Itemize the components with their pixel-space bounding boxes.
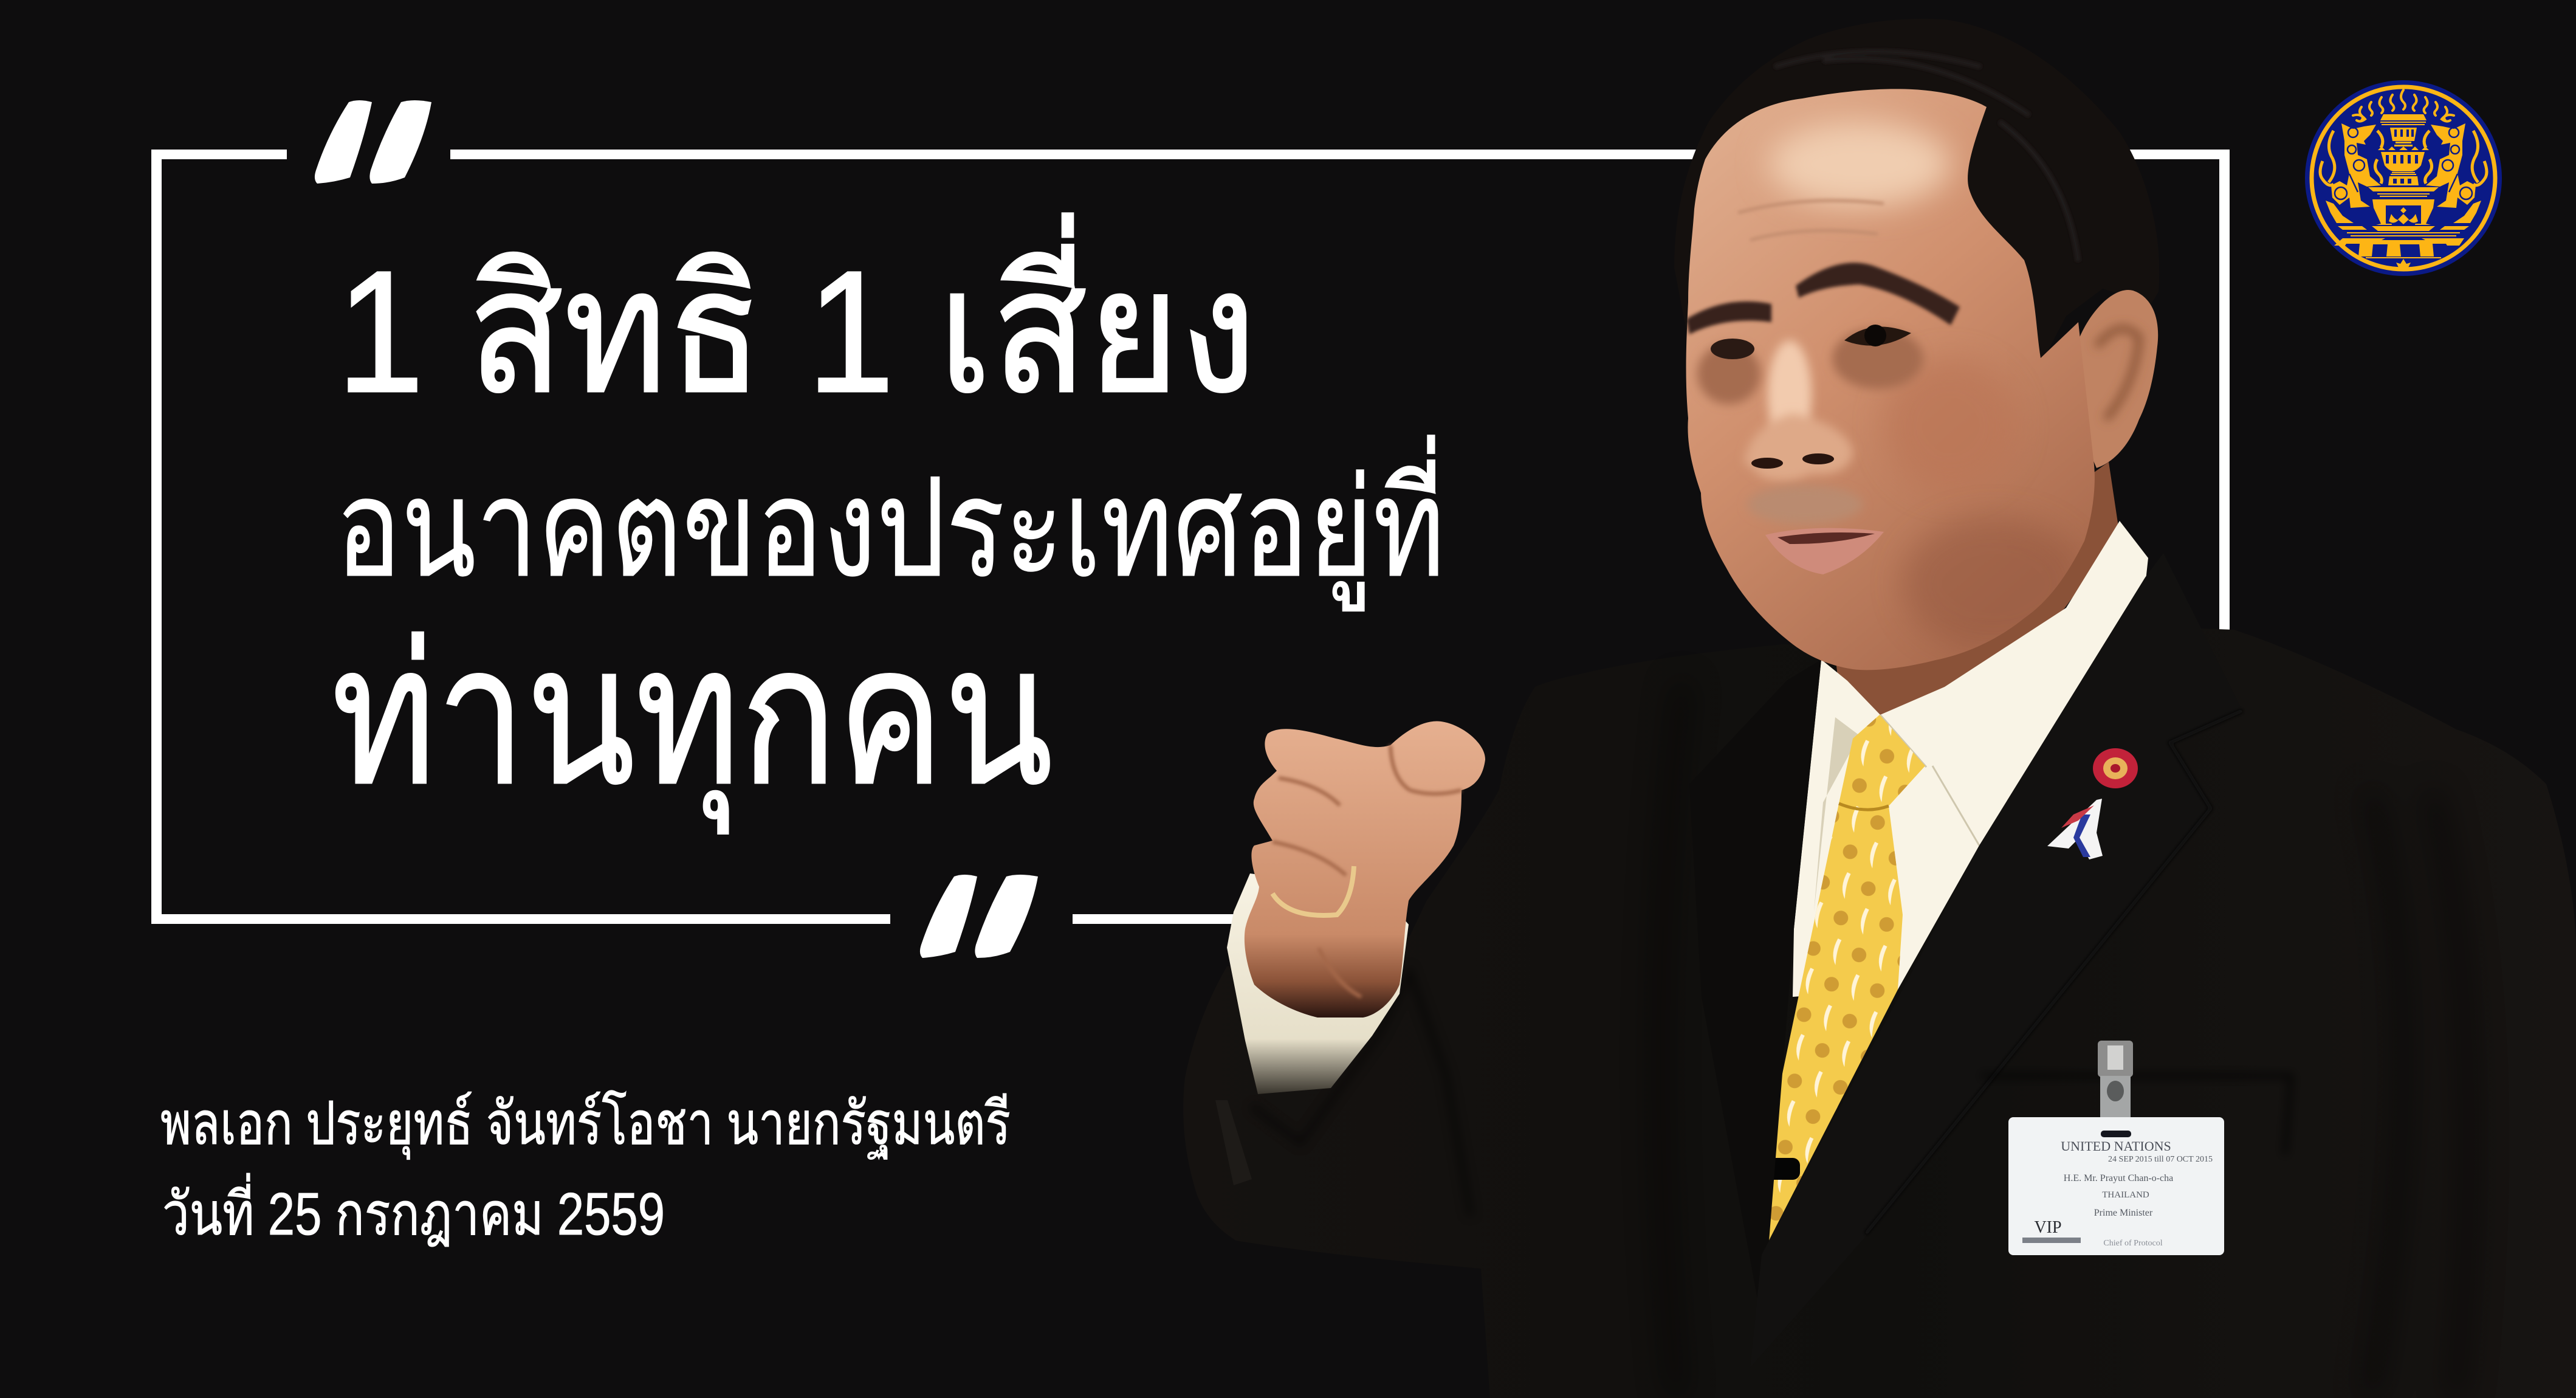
shirt cuff xyxy=(1227,873,1409,1094)
collar edge xyxy=(1880,715,1979,845)
left eye xyxy=(1711,339,1754,359)
seal flames xyxy=(2353,90,2454,122)
quote frame xyxy=(151,150,2230,924)
upper lip shade xyxy=(1747,485,1863,524)
ID badge: THAILAND xyxy=(2102,1190,2149,1200)
right eyebrow xyxy=(1796,263,1960,325)
wedding ring xyxy=(1273,866,1354,915)
hair highlights xyxy=(1774,52,2078,261)
ID badge: 24 SEP 2015 till 07 OCT 2015 xyxy=(2108,1155,2213,1164)
jaw shadow xyxy=(1902,517,2084,650)
hair xyxy=(1674,19,2159,365)
neck xyxy=(1835,462,2120,735)
shirt and collar xyxy=(1793,521,2148,997)
finger creases xyxy=(1273,745,1461,997)
necktie xyxy=(1762,715,1925,1255)
sleeve buttons xyxy=(1215,1100,1252,1185)
nose highlight xyxy=(1768,340,1812,450)
left eyebrow xyxy=(1686,301,1771,334)
right eye xyxy=(1844,326,1911,346)
lapel pin: red xyxy=(2093,748,2138,788)
raised hand with cuff xyxy=(1227,721,1485,1094)
person: portrait figure xyxy=(1183,19,2576,1398)
badge clip xyxy=(2098,1041,2133,1117)
seal pedestal vase xyxy=(2334,114,2469,269)
ID badge xyxy=(2008,1117,2224,1255)
left lapel xyxy=(1689,659,1821,1325)
emblem: government seal xyxy=(2305,80,2502,276)
eye bags xyxy=(1832,328,1923,389)
attribution: date: วันที่ 25 กรกฎาคม 2559 xyxy=(162,1173,665,1247)
lapel pin: ribbon xyxy=(2047,799,2103,859)
nose xyxy=(1744,413,1853,481)
jacket side shading xyxy=(1660,681,2468,1398)
seal vase detail xyxy=(2386,129,2421,224)
seal left guardian lion xyxy=(2320,123,2383,223)
headline line 1: 1 สิทธิ 1 เสี่ยง xyxy=(337,213,1257,429)
ear xyxy=(2078,290,2158,468)
forehead highlight xyxy=(1768,122,1951,207)
seal right guardian lion xyxy=(2424,123,2487,223)
headline line 2: อนาคตของประเทศอยู่ที่ xyxy=(335,435,1445,611)
right lapel xyxy=(1750,553,2242,1368)
ID badge: H.E. Mr. Prayut Chan-o-cha xyxy=(2064,1173,2173,1183)
seal table ornament xyxy=(2389,207,2418,224)
face xyxy=(1686,89,2095,670)
attribution: name and title: พลเอก ประยุทธ์ จันทร์โอชา นายกรัฐมนตรี xyxy=(160,1090,1011,1160)
closing quotation mark xyxy=(920,875,1038,958)
lips xyxy=(1765,528,1884,574)
jacket sleeve fold xyxy=(1252,973,1471,1216)
ID badge: Chief of Protocol xyxy=(2103,1239,2163,1248)
shirt shadow xyxy=(1814,717,1860,912)
jacket body xyxy=(1183,626,2576,1398)
hand xyxy=(1245,721,1485,1018)
ID badge: Prime Minister xyxy=(2094,1208,2153,1218)
cheek redness xyxy=(1892,365,1984,456)
head xyxy=(1674,19,2159,670)
headline line 3: ท่านทุกคน xyxy=(331,607,1053,835)
ID badge: UNITED NATIONS xyxy=(2061,1138,2171,1154)
ID badge: VIP xyxy=(2034,1218,2062,1237)
forehead creases xyxy=(1738,201,1884,240)
chest pocket xyxy=(1981,1076,2291,1155)
tie clip xyxy=(1765,1158,1800,1180)
opening quotation mark xyxy=(315,100,431,184)
